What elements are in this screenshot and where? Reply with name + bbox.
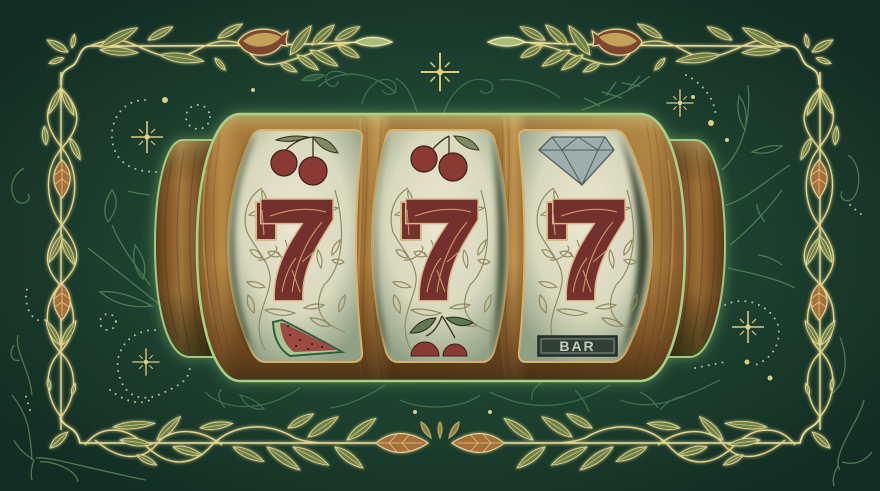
icon: cherries: [411, 136, 479, 181]
frame: left column: [42, 72, 83, 430]
frame: top-right garland: [488, 21, 835, 85]
BAR symbol: BAR: [559, 338, 596, 354]
column leaves: [46, 89, 63, 115]
frame: bottom-left garland: [48, 411, 428, 473]
reel 1 vines: [245, 188, 345, 350]
left drum: [155, 140, 220, 357]
seven: 7: [552, 176, 626, 325]
tip leaf: [355, 38, 392, 46]
sparkle and dot ornaments: [24, 53, 862, 414]
small gold dots: [162, 88, 772, 414]
BAR symbol: [538, 336, 617, 356]
wood grain: [205, 118, 671, 378]
reel 3 vines: [537, 188, 637, 350]
reel 2 vines: [391, 188, 491, 350]
reel 3 window: [519, 130, 652, 362]
machine body: [197, 114, 685, 381]
icon: pomegranate: [238, 29, 288, 55]
ornament: lower corners: [11, 335, 872, 486]
right drum: [660, 140, 725, 357]
icon: cherries: [271, 136, 338, 185]
icon: lower cherries: [410, 316, 473, 356]
bottom stems: [60, 418, 376, 443]
frame: bottom-right garland: [452, 411, 832, 473]
column stems: [60, 72, 62, 430]
ornament: right side foliage: [12, 85, 859, 288]
sparkle: lower right: [732, 311, 764, 343]
reel 3: [519, 130, 652, 362]
leaves: [98, 24, 140, 51]
bottom leaves: [286, 411, 315, 431]
seven: 7: [260, 176, 334, 325]
seven: 7: [405, 176, 479, 325]
reel 1: [228, 130, 362, 362]
ornament: top vines: [302, 71, 650, 115]
reel 2 window: [372, 130, 508, 362]
seven: 7: [405, 176, 479, 325]
reel 1 window: [228, 130, 362, 362]
icon: watermelon: [273, 320, 342, 356]
sparkle: lower left: [132, 348, 160, 376]
seven: 7: [260, 176, 334, 325]
sparkle: upper right: [666, 89, 694, 117]
vine stems: [61, 42, 362, 85]
ornament: bottom vines: [205, 380, 720, 438]
frame: right column: [798, 72, 839, 430]
machine glow: [155, 114, 725, 381]
tan leaves: [54, 160, 70, 198]
icon: diamond: [539, 137, 614, 185]
sparkle: top centre: [421, 53, 459, 91]
slot machine: [155, 114, 725, 381]
reel 2: [372, 130, 508, 362]
dotted arcs: [24, 75, 862, 410]
frame: top-left garland: [45, 21, 392, 85]
bottom tip leaf: [376, 434, 428, 452]
ornament: left side foliage: [88, 190, 160, 307]
sparkle: upper left: [131, 121, 163, 153]
seven: 7: [552, 176, 626, 325]
